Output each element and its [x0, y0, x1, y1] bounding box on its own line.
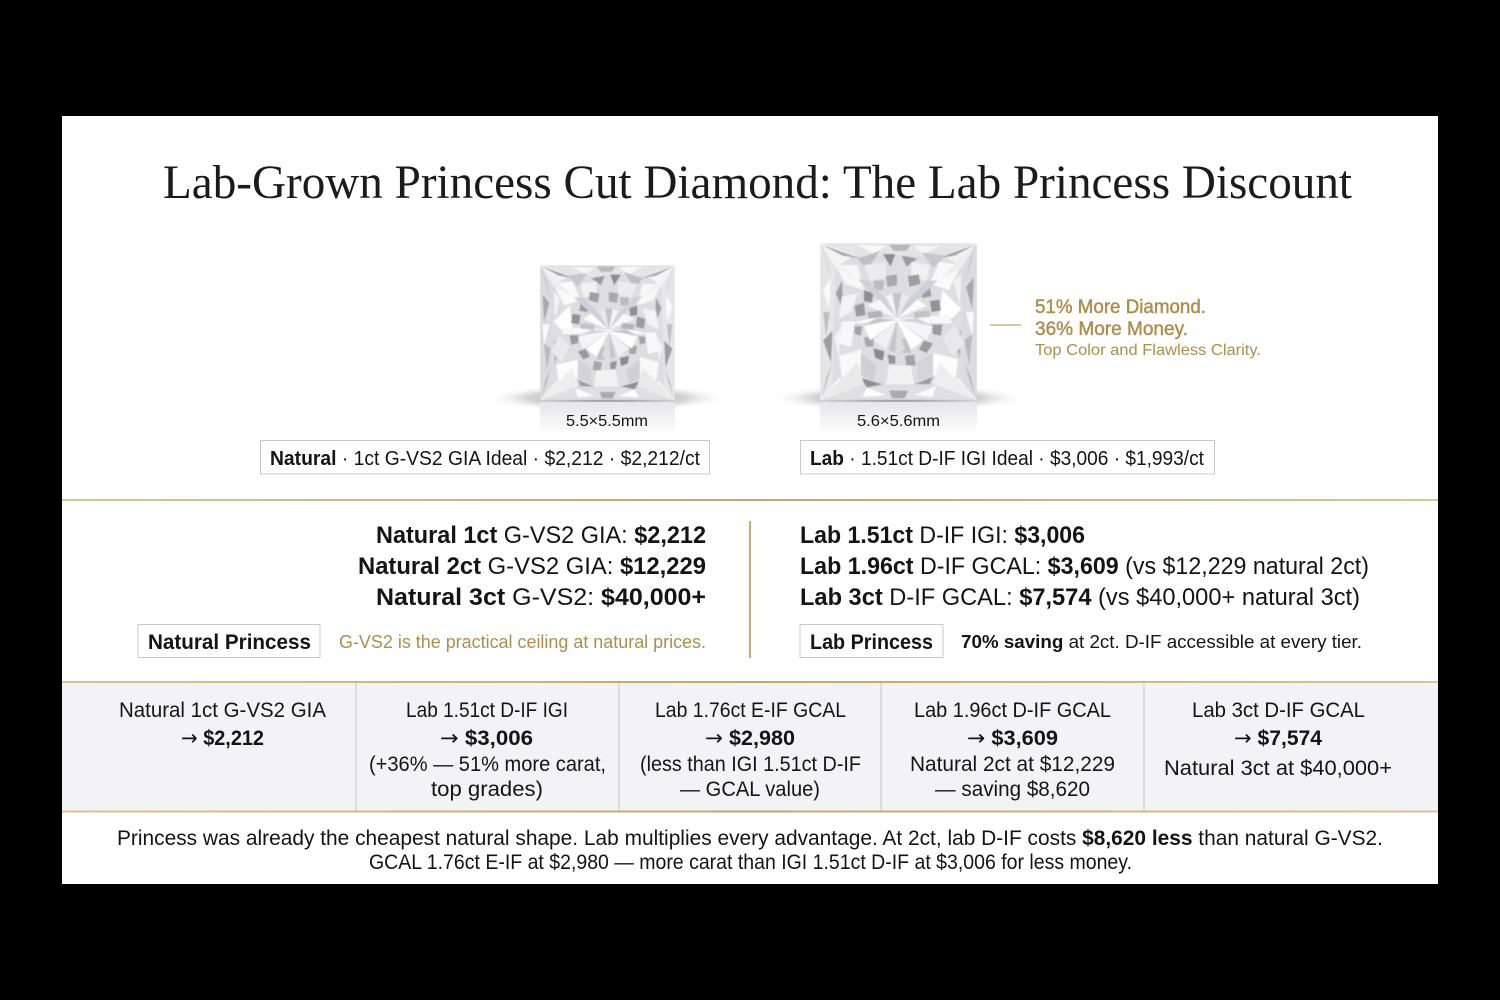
cell: natural 1ct [119, 699, 326, 750]
cell: lab 1.51ct: Lab 1.51ct D-IF IGI [406, 699, 568, 722]
cell: lab 1.76ct: → $2,980 [705, 726, 795, 750]
cell: lab 1.51ct: → $3,006 [440, 726, 533, 750]
spec label: natural: Natural · 1ct G-VS2 GIA Ideal · $2,212 · $2,212/ct [270, 447, 700, 470]
panel: lab pricing: Lab 3ct D-IF GCAL: $7,574 (vs $40,000+ natural 3ct) [800, 584, 1360, 611]
spec label: lab: Lab · 1.51ct D-IF IGI Ideal · $3,006 · $1,993/ct [810, 447, 1204, 470]
note: natural: G-VS2 is the practical ceiling at natural prices. [339, 632, 706, 652]
cell: lab 3ct [1164, 699, 1392, 780]
footer summary: Princess was already the cheapest natural shape. Lab multiplies every advantage. At 2ct, lab D-IF costs $8,620 less than natural G-VS2. [117, 827, 1383, 850]
icon: lab princess diamond [820, 243, 977, 400]
cell: natural 1ct: → $2,212 [181, 726, 264, 750]
callout: lab advantages: 36% More Money. [1035, 319, 1188, 340]
panel: natural diamond [485, 265, 729, 435]
panel: lab pricing [800, 522, 1369, 658]
cell: lab 1.96ct: Natural 2ct at $12,229 [910, 753, 1115, 776]
callout: lab advantages: Top Color and Flawless Clarity. [1035, 342, 1261, 359]
cell: lab 1.96ct [910, 699, 1115, 801]
panel: lab pricing: Lab 1.51ct D-IF IGI: $3,006 [800, 522, 1085, 549]
badge: Lab Princess [800, 624, 943, 658]
shadow: lab diamond [768, 384, 1028, 412]
size label: lab: 5.6×5.6mm [857, 413, 940, 430]
spec label: natural [260, 440, 710, 474]
panel: natural pricing [138, 522, 706, 658]
cell: lab 3ct: Lab 3ct D-IF GCAL [1192, 699, 1365, 722]
footer summary: GCAL 1.76ct E-IF at $2,980 — more carat than IGI 1.51ct D-IF at $3,006 for less money. [369, 851, 1132, 874]
cell: lab 1.76ct [640, 699, 861, 801]
panel: lab diamond [768, 243, 1028, 435]
badge: Natural Princess [138, 624, 320, 658]
main white panel [62, 116, 1438, 884]
callout: lab advantages: 51% More Diamond. [1035, 297, 1206, 318]
note: lab: 70% saving at 2ct. D-IF accessible at every tier. [961, 632, 1362, 652]
shadow: natural diamond [485, 384, 729, 412]
cell: lab 1.76ct: — GCAL value) [680, 778, 820, 801]
cell: lab 3ct: Natural 3ct at $40,000+ [1164, 757, 1392, 780]
cell: natural 1ct: Natural 1ct G-VS2 GIA [119, 699, 326, 722]
cell: lab 1.96ct: Lab 1.96ct D-IF GCAL [914, 699, 1111, 722]
reflection: natural diamond [540, 402, 675, 435]
cell: lab 1.76ct: (less than IGI 1.51ct D-IF [640, 753, 861, 776]
reflection: lab diamond [820, 402, 977, 435]
panel: natural pricing: Natural 3ct G-VS2: $40,000+ [376, 584, 706, 611]
panel: natural pricing: Natural 1ct G-VS2 GIA: $2,212 [376, 522, 706, 549]
cell: lab 1.96ct: → $3,609 [967, 726, 1058, 750]
cell: lab 3ct: → $7,574 [1234, 726, 1322, 750]
spec label: lab [800, 440, 1214, 474]
cell: lab 1.51ct [369, 699, 606, 801]
cell: lab 1.76ct: Lab 1.76ct E-IF GCAL [655, 699, 846, 722]
title: Lab-Grown Princess Cut Diamond: The Lab Princess Discount [163, 156, 1353, 209]
footer summary [117, 827, 1383, 874]
icon: natural princess diamond [540, 265, 675, 400]
callout: lab advantages [990, 297, 1261, 359]
panel: natural pricing: Natural 2ct G-VS2 GIA: $12,229 [358, 553, 706, 580]
cell: lab 1.51ct: top grades) [431, 778, 543, 801]
cell: lab 1.51ct: (+36% — 51% more carat, [369, 753, 606, 776]
comparison table [62, 681, 1438, 812]
badge: Lab Princess: Lab Princess [810, 630, 933, 654]
cell: lab 1.96ct: — saving $8,620 [935, 778, 1090, 801]
size label: natural: 5.5×5.5mm [566, 413, 648, 430]
badge: Natural Princess: Natural Princess [148, 630, 311, 654]
panel: lab pricing: Lab 1.96ct D-IF GCAL: $3,609 (vs $12,229 natural 2ct) [800, 553, 1369, 580]
